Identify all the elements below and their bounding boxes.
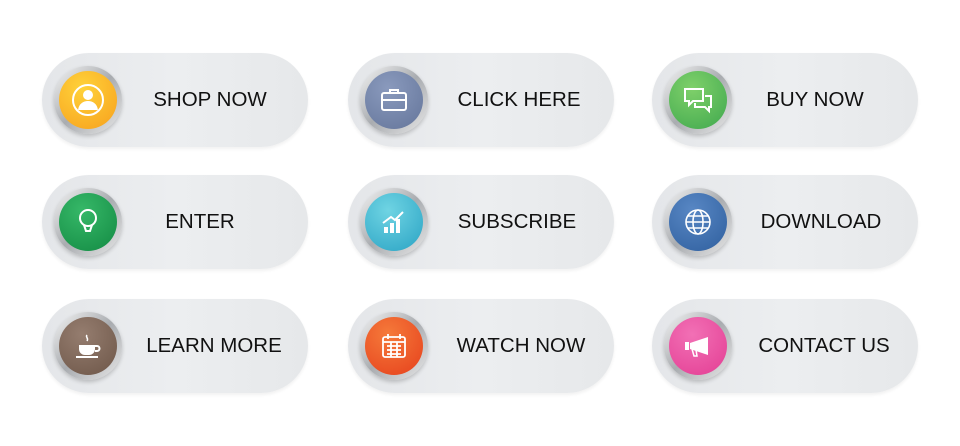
label: CONTACT US [758,334,890,357]
icon: megaphone [664,312,732,380]
button: watch now [348,299,614,393]
button: download [652,175,918,269]
icon: briefcase [360,66,428,134]
label: SUBSCRIBE [458,210,576,233]
button: click here [348,53,614,147]
label: WATCH NOW [457,334,585,357]
label: CLICK HERE [457,88,581,111]
icon: balloon [54,188,122,256]
icon: coffee [54,312,122,380]
label: ENTER [165,210,235,233]
icon: chat [664,66,732,134]
button: subscribe [348,175,614,269]
button: learn more [42,299,308,393]
label: LEARN MORE [146,334,282,357]
label: DOWNLOAD [761,210,881,233]
label: SHOP NOW [153,88,267,111]
button: contact us [652,299,918,393]
icon: person [54,66,122,134]
button: enter [42,175,308,269]
label: BUY NOW [766,88,864,111]
icon: calendar [360,312,428,380]
button: buy now [652,53,918,147]
button: shop now [42,53,308,147]
icon: chart [360,188,428,256]
icon: globe [664,188,732,256]
